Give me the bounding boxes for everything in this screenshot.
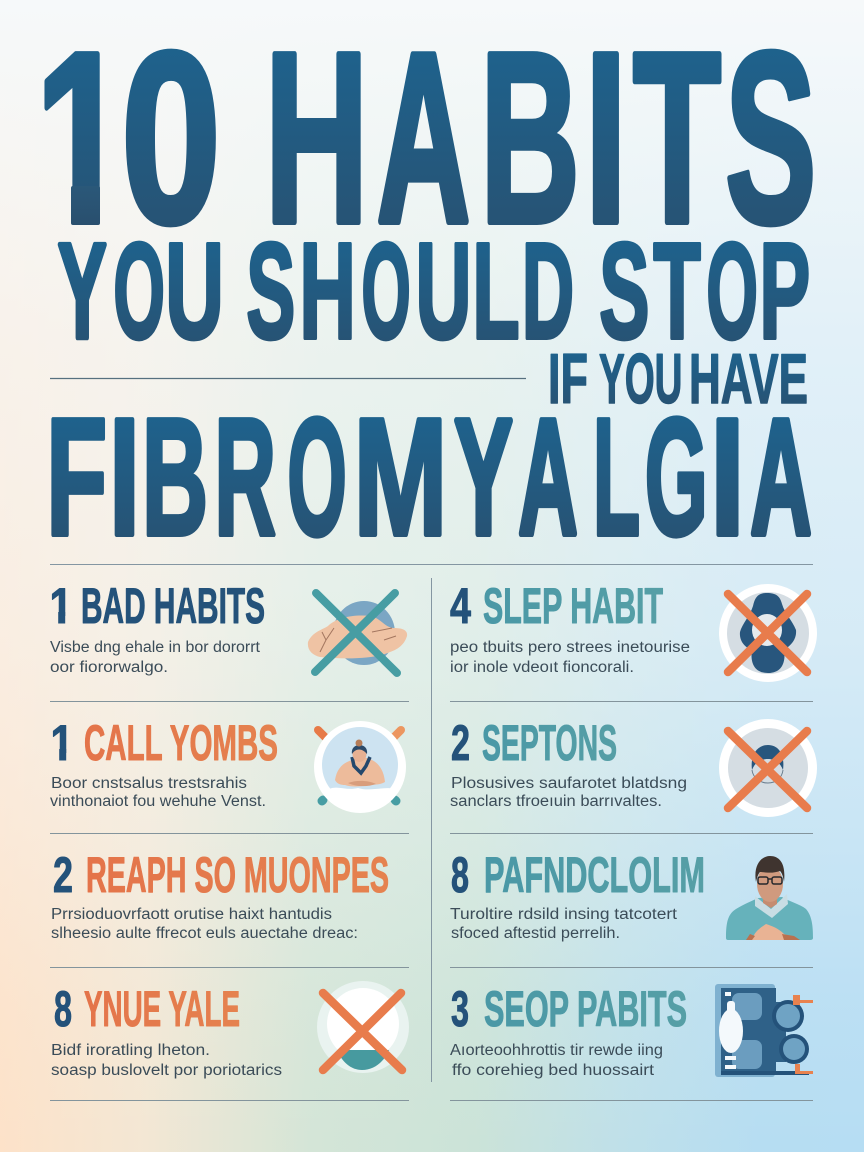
description bbox=[450, 1042, 663, 1079]
number bbox=[52, 725, 66, 760]
panel: habit left 3 bbox=[51, 847, 389, 942]
description: Prrsioduovrfaott orutise haixt hantudis bbox=[51, 906, 332, 923]
title line: YOU SHOULD STOP: O bbox=[361, 214, 411, 367]
title line: YOU SHOULD STOP: S bbox=[246, 214, 295, 367]
title line: FIBROMYALGIA: I bbox=[109, 384, 140, 570]
title line: YOU SHOULD STOP: U bbox=[416, 214, 472, 367]
number: 1 bbox=[50, 578, 72, 634]
heading: PAFNDCLOLIM bbox=[484, 847, 705, 903]
panel: habit right 3 bbox=[450, 847, 813, 942]
number: 1 bbox=[50, 715, 74, 771]
description: ffo corehieg bed huossairt bbox=[452, 1062, 655, 1079]
description: soasp buslovelt por poriotarics bbox=[51, 1062, 282, 1079]
title line: YOU SHOULD STOP: S bbox=[599, 214, 650, 367]
title line: FIBROMYALGIA: F bbox=[46, 384, 107, 570]
description: peo tbuits pero strees inetourise bbox=[450, 639, 690, 656]
heading: CALL YOMBS bbox=[84, 715, 278, 771]
description bbox=[450, 906, 678, 942]
title line: IF YOU HAVE bbox=[548, 339, 808, 418]
description: sfoced aftestid perrelih. bbox=[451, 925, 620, 942]
title line: IF YOU HAVE: IF bbox=[548, 339, 588, 418]
panel: habit right 2 bbox=[450, 715, 817, 817]
description bbox=[50, 775, 266, 810]
title line: 10 HABITS bbox=[44, 48, 813, 228]
heading: SLEP HABIT bbox=[483, 578, 663, 634]
title line: 10 HABITS: 1 bbox=[35, 1, 129, 274]
title line: FIBROMYALGIA: M bbox=[354, 384, 448, 570]
title line: YOU SHOULD STOP: P bbox=[759, 214, 810, 367]
icon: dark shape crossed out bbox=[719, 584, 817, 682]
description: sanclars tfroeıuin barrıvaltes. bbox=[450, 793, 662, 810]
description: ior inole vdeoıt fioncorali. bbox=[450, 659, 634, 676]
panel: habit left 4 bbox=[51, 981, 409, 1079]
panel: habit left 2 bbox=[50, 715, 406, 813]
title line: 10 HABITS: B bbox=[480, 1, 580, 274]
icon: medical machine bbox=[715, 984, 813, 1077]
panel: habit left 1 bbox=[50, 578, 407, 676]
number: 3 bbox=[451, 981, 469, 1037]
title line: YOU SHOULD STOP bbox=[58, 214, 810, 367]
title line: YOU SHOULD STOP: O bbox=[706, 214, 758, 367]
title line: FIBROMYALGIA: L bbox=[593, 384, 640, 570]
heading: SEPTONS bbox=[482, 715, 617, 771]
title line: IF YOU HAVE: YOU bbox=[599, 339, 682, 418]
number: 4 bbox=[450, 578, 471, 634]
panel: habit right 4 bbox=[450, 981, 813, 1079]
number bbox=[52, 588, 66, 624]
heading: REAPH SO MUONPES bbox=[86, 847, 389, 903]
icon: man with glasses bbox=[726, 856, 813, 940]
number: 2 bbox=[53, 847, 73, 903]
title line: 10 HABITS: T bbox=[633, 1, 721, 274]
number: 8 bbox=[451, 847, 469, 903]
description: Visbe dng ehale in bor dororrt bbox=[50, 639, 261, 656]
icon: person in bath bbox=[314, 721, 406, 813]
title line: FIBROMYALGIA: I bbox=[710, 384, 745, 570]
title line: 10 HABITS: 0 bbox=[121, 1, 221, 274]
title line: FIBROMYALGIA: O bbox=[287, 384, 347, 570]
panel: habit right 1 bbox=[450, 578, 817, 682]
description: Turoltire rdsild insing tatcotert bbox=[450, 906, 678, 923]
number: 8 bbox=[54, 981, 72, 1037]
title line: 10 HABITS: H bbox=[265, 1, 369, 274]
description bbox=[450, 639, 690, 676]
title line: YOU SHOULD STOP: Y bbox=[58, 216, 106, 366]
icon: bowl crossed out bbox=[317, 981, 409, 1073]
description bbox=[450, 775, 687, 810]
title line: FIBROMYALGIA bbox=[46, 384, 811, 570]
number: 2 bbox=[451, 715, 470, 771]
title line: FIBROMYALGIA: Y bbox=[454, 386, 512, 568]
title line: YOU SHOULD STOP: U bbox=[165, 214, 224, 367]
title line: FIBROMYALGIA: A bbox=[518, 386, 578, 568]
title line: FIBROMYALGIA: B bbox=[142, 384, 208, 570]
description bbox=[51, 906, 358, 942]
title line: FIBROMYALGIA: R bbox=[214, 384, 276, 570]
title line: FIBROMYALGIA: G bbox=[645, 384, 708, 570]
description: Aıorteoohhrottis tir rewde iing bbox=[450, 1042, 663, 1059]
heading: SEOP PABITS bbox=[484, 981, 687, 1037]
description: Plosusives saufarotet blatdsng bbox=[451, 775, 687, 792]
title line: YOU SHOULD STOP: H bbox=[299, 214, 356, 367]
description: Bidf iroratling lheton. bbox=[51, 1042, 210, 1059]
title line: YOU SHOULD STOP: D bbox=[522, 214, 574, 367]
title line: YOU SHOULD STOP: L bbox=[472, 214, 520, 367]
description bbox=[51, 1042, 282, 1079]
heading: BAD HABITS bbox=[81, 578, 265, 634]
description: Boor cnstsalus trestsrahis bbox=[51, 775, 247, 792]
title line: YOU SHOULD STOP: T bbox=[653, 214, 701, 367]
description bbox=[50, 639, 261, 676]
title line: YOU SHOULD STOP: O bbox=[113, 214, 165, 367]
icon: body crossed out bbox=[308, 593, 407, 673]
title line: 10 HABITS: A bbox=[377, 4, 470, 273]
icon: ring crossed out bbox=[719, 719, 817, 817]
description: slheesio aulte ffrecot euls auectahe dreac: bbox=[51, 925, 358, 942]
description: oor fiororwalgo. bbox=[50, 659, 168, 676]
title line: 10 HABITS: I bbox=[584, 1, 627, 274]
description: vinthonaiot fou wehuhe Venst. bbox=[50, 793, 266, 810]
heading: YNUE YALE bbox=[84, 981, 240, 1037]
title bbox=[44, 48, 813, 539]
